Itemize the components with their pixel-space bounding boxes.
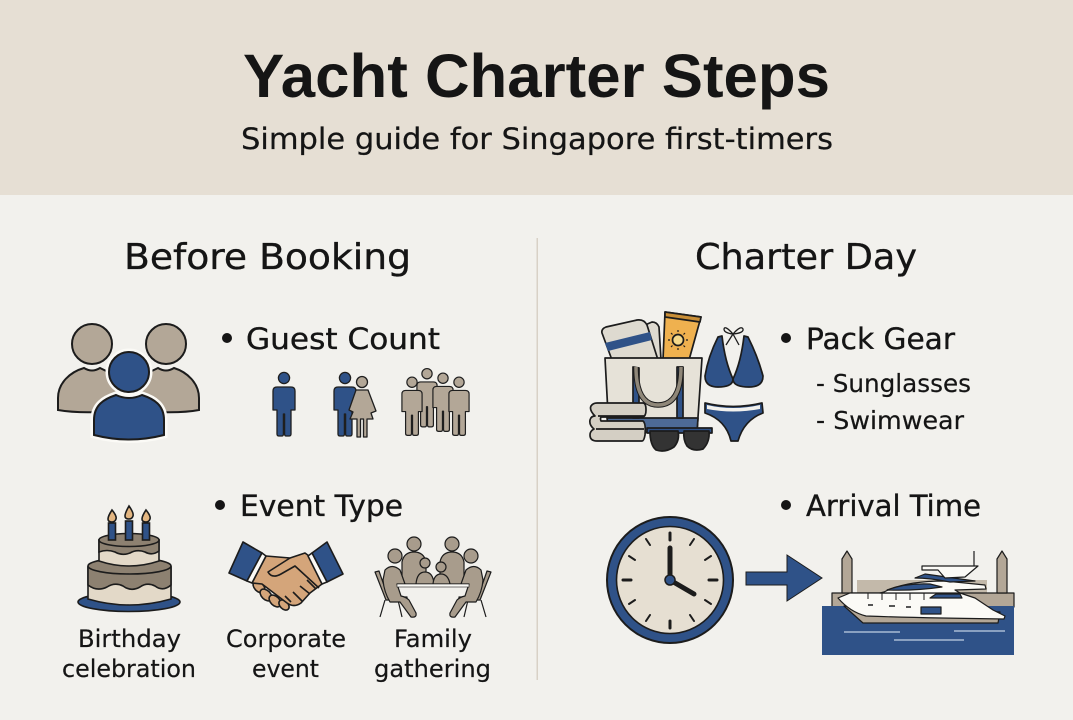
caption: family gathering: gathering: [374, 655, 491, 683]
caption: birthday celebration: celebration: [62, 655, 196, 683]
header band: [0, 0, 1073, 195]
bullet: arrival time: [781, 500, 791, 510]
icon: family at table: [375, 537, 491, 617]
panel: before booking: [58, 237, 491, 683]
caption: birthday celebration: Birthday: [78, 625, 181, 653]
caption: corporate event: [226, 625, 346, 683]
caption: family gathering: Family: [394, 625, 472, 653]
icon: two guests: [334, 372, 376, 437]
bullet: pack gear: [781, 333, 791, 343]
icon: large guest group: [58, 324, 199, 440]
list item: swimwear: - Swimwear: [816, 406, 965, 435]
list item: sunglasses: - Sunglasses: [816, 369, 971, 398]
label: pack gear: Pack Gear: [806, 322, 955, 356]
arrow: [746, 555, 822, 601]
label: guest count: Guest Count: [246, 322, 440, 356]
icon: group of guests: [402, 369, 469, 435]
column divider: [536, 238, 538, 680]
icon: yacht at marina: [822, 551, 1014, 655]
caption: corporate event: event: [252, 655, 319, 683]
caption: birthday celebration: [62, 625, 196, 683]
caption: family gathering: [374, 625, 491, 683]
bullet: guest count: [222, 333, 232, 343]
label: event type: Event Type: [240, 489, 403, 523]
label: arrival time: Arrival Time: [806, 489, 981, 523]
title: Yacht Charter Steps: [243, 42, 830, 110]
heading: before booking: Before Booking: [124, 237, 411, 278]
icon: family table top: [397, 584, 469, 587]
subtitle: Simple guide for Singapore first-timers: [241, 122, 833, 156]
icon: handshake: [229, 542, 343, 612]
icon: birthday cake: [78, 506, 180, 612]
icon: clock: [607, 517, 733, 643]
icon: one guest: [273, 372, 295, 436]
bullet: event type: [215, 500, 225, 510]
icon: beach bag with gear: [590, 312, 763, 451]
caption: corporate event: Corporate: [226, 625, 346, 653]
panel: charter day: [590, 237, 1014, 655]
heading: charter day: Charter Day: [695, 237, 917, 278]
